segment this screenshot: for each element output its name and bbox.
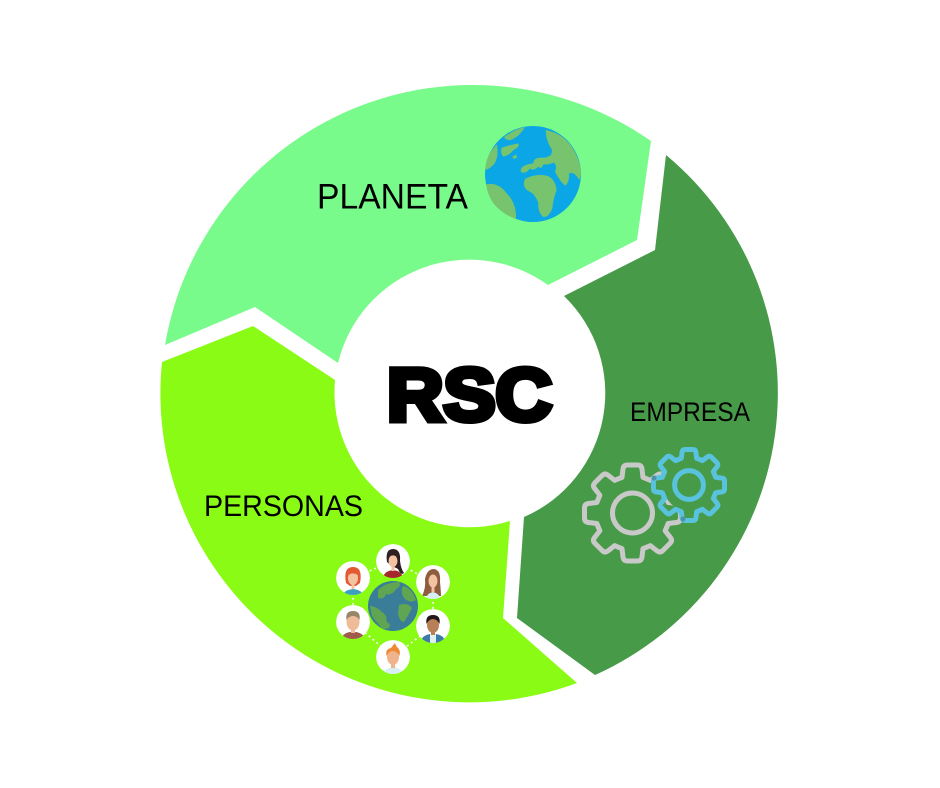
icon: people around globe xyxy=(336,544,450,674)
person: top woman xyxy=(376,544,410,578)
person: upper left woman xyxy=(336,561,370,595)
gear: blue xyxy=(653,449,725,521)
panel: personas segment xyxy=(160,326,577,702)
person: bottom man xyxy=(376,640,410,674)
label: EMPRESA: EMPRESA xyxy=(630,397,750,427)
person: upper right woman xyxy=(416,565,450,599)
heading: RSC: RSC xyxy=(387,354,552,436)
icon: gears xyxy=(584,449,725,561)
icon: earth globe xyxy=(485,126,581,222)
person: lower left man xyxy=(336,605,370,639)
globe xyxy=(368,581,418,631)
dotted connections xyxy=(353,561,433,657)
panel: planeta segment xyxy=(165,85,651,363)
gear: grey xyxy=(584,465,680,561)
label: PERSONAS: PERSONAS xyxy=(204,490,363,523)
label: PLANETA: PLANETA xyxy=(317,178,469,216)
diagram: RSC cycle xyxy=(160,85,778,702)
person: lower right man xyxy=(416,609,450,643)
panel: empresa segment xyxy=(517,155,778,675)
